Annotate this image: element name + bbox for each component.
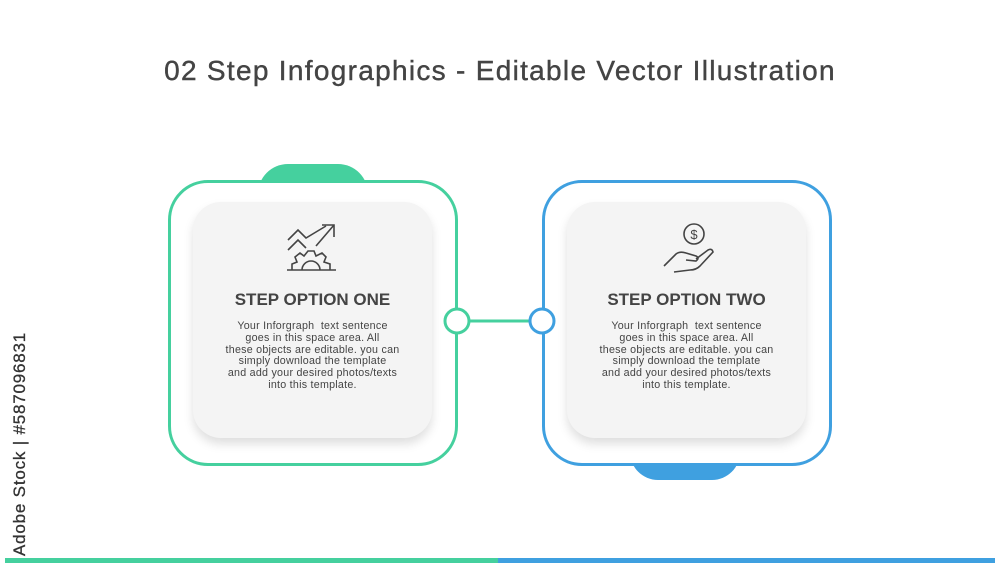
card: step one: and add your desired photos/texts <box>228 367 397 379</box>
card: step two: goes in this space area. All <box>619 332 754 344</box>
panel: step one <box>168 180 458 466</box>
panel: step two <box>542 180 832 466</box>
tab: step two <box>630 452 740 480</box>
tab: step one <box>258 164 368 194</box>
card: step one: Your Inforgraph text sentence <box>237 320 388 332</box>
card: step two: Your Inforgraph text sentence <box>611 320 762 332</box>
icon: hand with coin <box>664 223 714 273</box>
card: step one: goes in this space area. All <box>245 332 380 344</box>
icon: growth gear <box>287 224 336 271</box>
card: step two: STEP OPTION TWO <box>607 290 766 309</box>
card: step one: into this template. <box>268 379 357 391</box>
bottom bar <box>5 558 995 563</box>
card: step one: these objects are editable. you can <box>226 344 399 356</box>
card: step one: simply download the template <box>239 355 386 367</box>
card: step one <box>193 202 432 438</box>
card: step two: into this template. <box>642 379 731 391</box>
title: 02 Step Infographics - Editable Vector Illustration <box>164 55 836 86</box>
card: step two <box>567 202 806 438</box>
watermark credit: Adobe Stock | #587096831 <box>10 332 29 556</box>
card: step two: and add your desired photos/texts <box>602 367 771 379</box>
icon: hand with coin: $ <box>690 227 698 242</box>
card: step one: STEP OPTION ONE <box>235 290 390 309</box>
card: step two: simply download the template <box>613 355 760 367</box>
connector <box>444 308 556 334</box>
card: step two: these objects are editable. you can <box>600 344 773 356</box>
